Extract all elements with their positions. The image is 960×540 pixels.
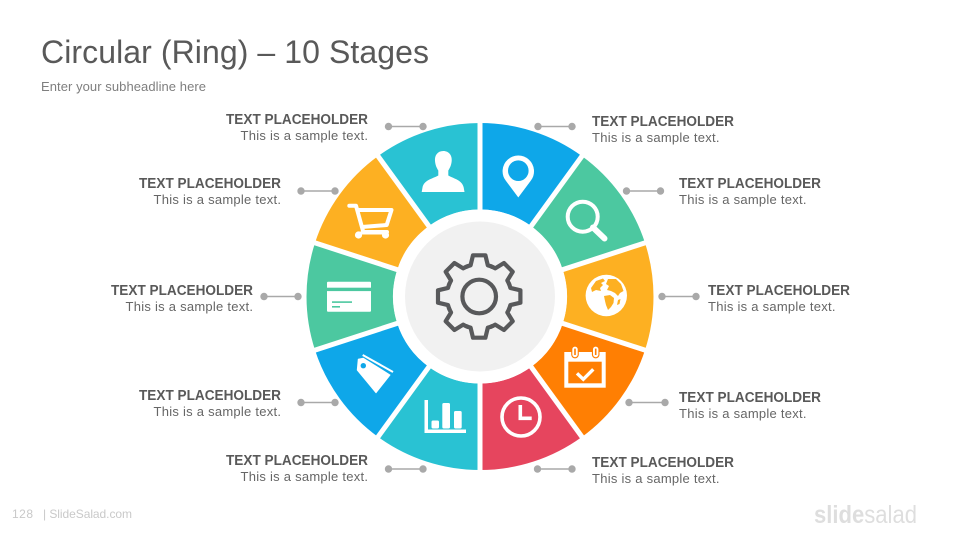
callout: left 4 [139,388,339,419]
footer site name: | SlideSalad.com [43,507,132,521]
icon: calendar [564,346,606,388]
segment 4: orange [531,323,645,437]
brand logo: slidesalad [814,501,917,529]
callout: top right 1 [534,114,734,145]
icon: price tag [357,355,393,393]
callout: left 5 [226,453,427,484]
icon: gear [438,255,520,338]
callout: left 1 [226,112,427,143]
icon: person [422,151,464,192]
callout: top right 1: This is a sample text. [592,130,720,145]
callout: left 4: This is a sample text. [154,404,281,419]
callout: right 5: TEXT PLACEHOLDER [592,455,734,471]
subheadline: Enter your subheadline here [41,79,206,94]
callout: right 3: This is a sample text. [708,299,836,314]
callout: right 4: This is a sample text. [679,406,806,421]
callout: right 4 [625,390,821,421]
callout: right 3: TEXT PLACEHOLDER [708,283,850,299]
callout: right 5 [534,455,734,486]
callout: left 1: This is a sample text. [240,128,368,143]
icon: magnifier [568,202,604,238]
callout: left 3: TEXT PLACEHOLDER [111,283,253,299]
segment 7: blue [315,323,429,437]
segment 3: yellow [563,243,653,350]
center hub [405,222,555,372]
segment 6: teal [378,367,480,470]
segment 8: green [307,243,397,350]
icon: globe [586,275,627,316]
segment 2: green [531,156,645,270]
callout: right 5: This is a sample text. [592,471,720,486]
callout: left 4: TEXT PLACEHOLDER [139,388,281,404]
callout: right 2 [623,176,821,207]
callout: left 1: TEXT PLACEHOLDER [226,112,368,128]
icon: bar chart [424,400,466,433]
callout: left 3 [111,283,302,314]
segment 5: red [480,367,582,470]
segment 10: teal [378,123,480,226]
callout: right 4: TEXT PLACEHOLDER [679,390,821,406]
callout: right 3 [658,283,850,314]
callout: right 2: TEXT PLACEHOLDER [679,176,821,192]
ring diagram [307,115,653,478]
icon: credit card [327,282,371,312]
icon: clock [502,398,540,436]
footer page number: 128 [12,507,33,521]
callout: left 2: TEXT PLACEHOLDER [139,176,281,192]
callout: left 5: This is a sample text. [240,469,368,484]
callout: left 2: This is a sample text. [154,192,281,207]
icon: location pin [503,156,534,197]
callout: top right 1: TEXT PLACEHOLDER [592,114,734,130]
callout: left 5: TEXT PLACEHOLDER [226,453,368,469]
title: Circular (Ring) – 10 Stages [41,34,429,70]
segment 1: blue [480,123,582,226]
callout: right 2: This is a sample text. [679,192,806,207]
segment 9: yellow [315,156,429,270]
callout: left 3: This is a sample text. [126,299,253,314]
callout: left 2 [139,176,339,207]
icon: shopping cart [349,206,392,239]
